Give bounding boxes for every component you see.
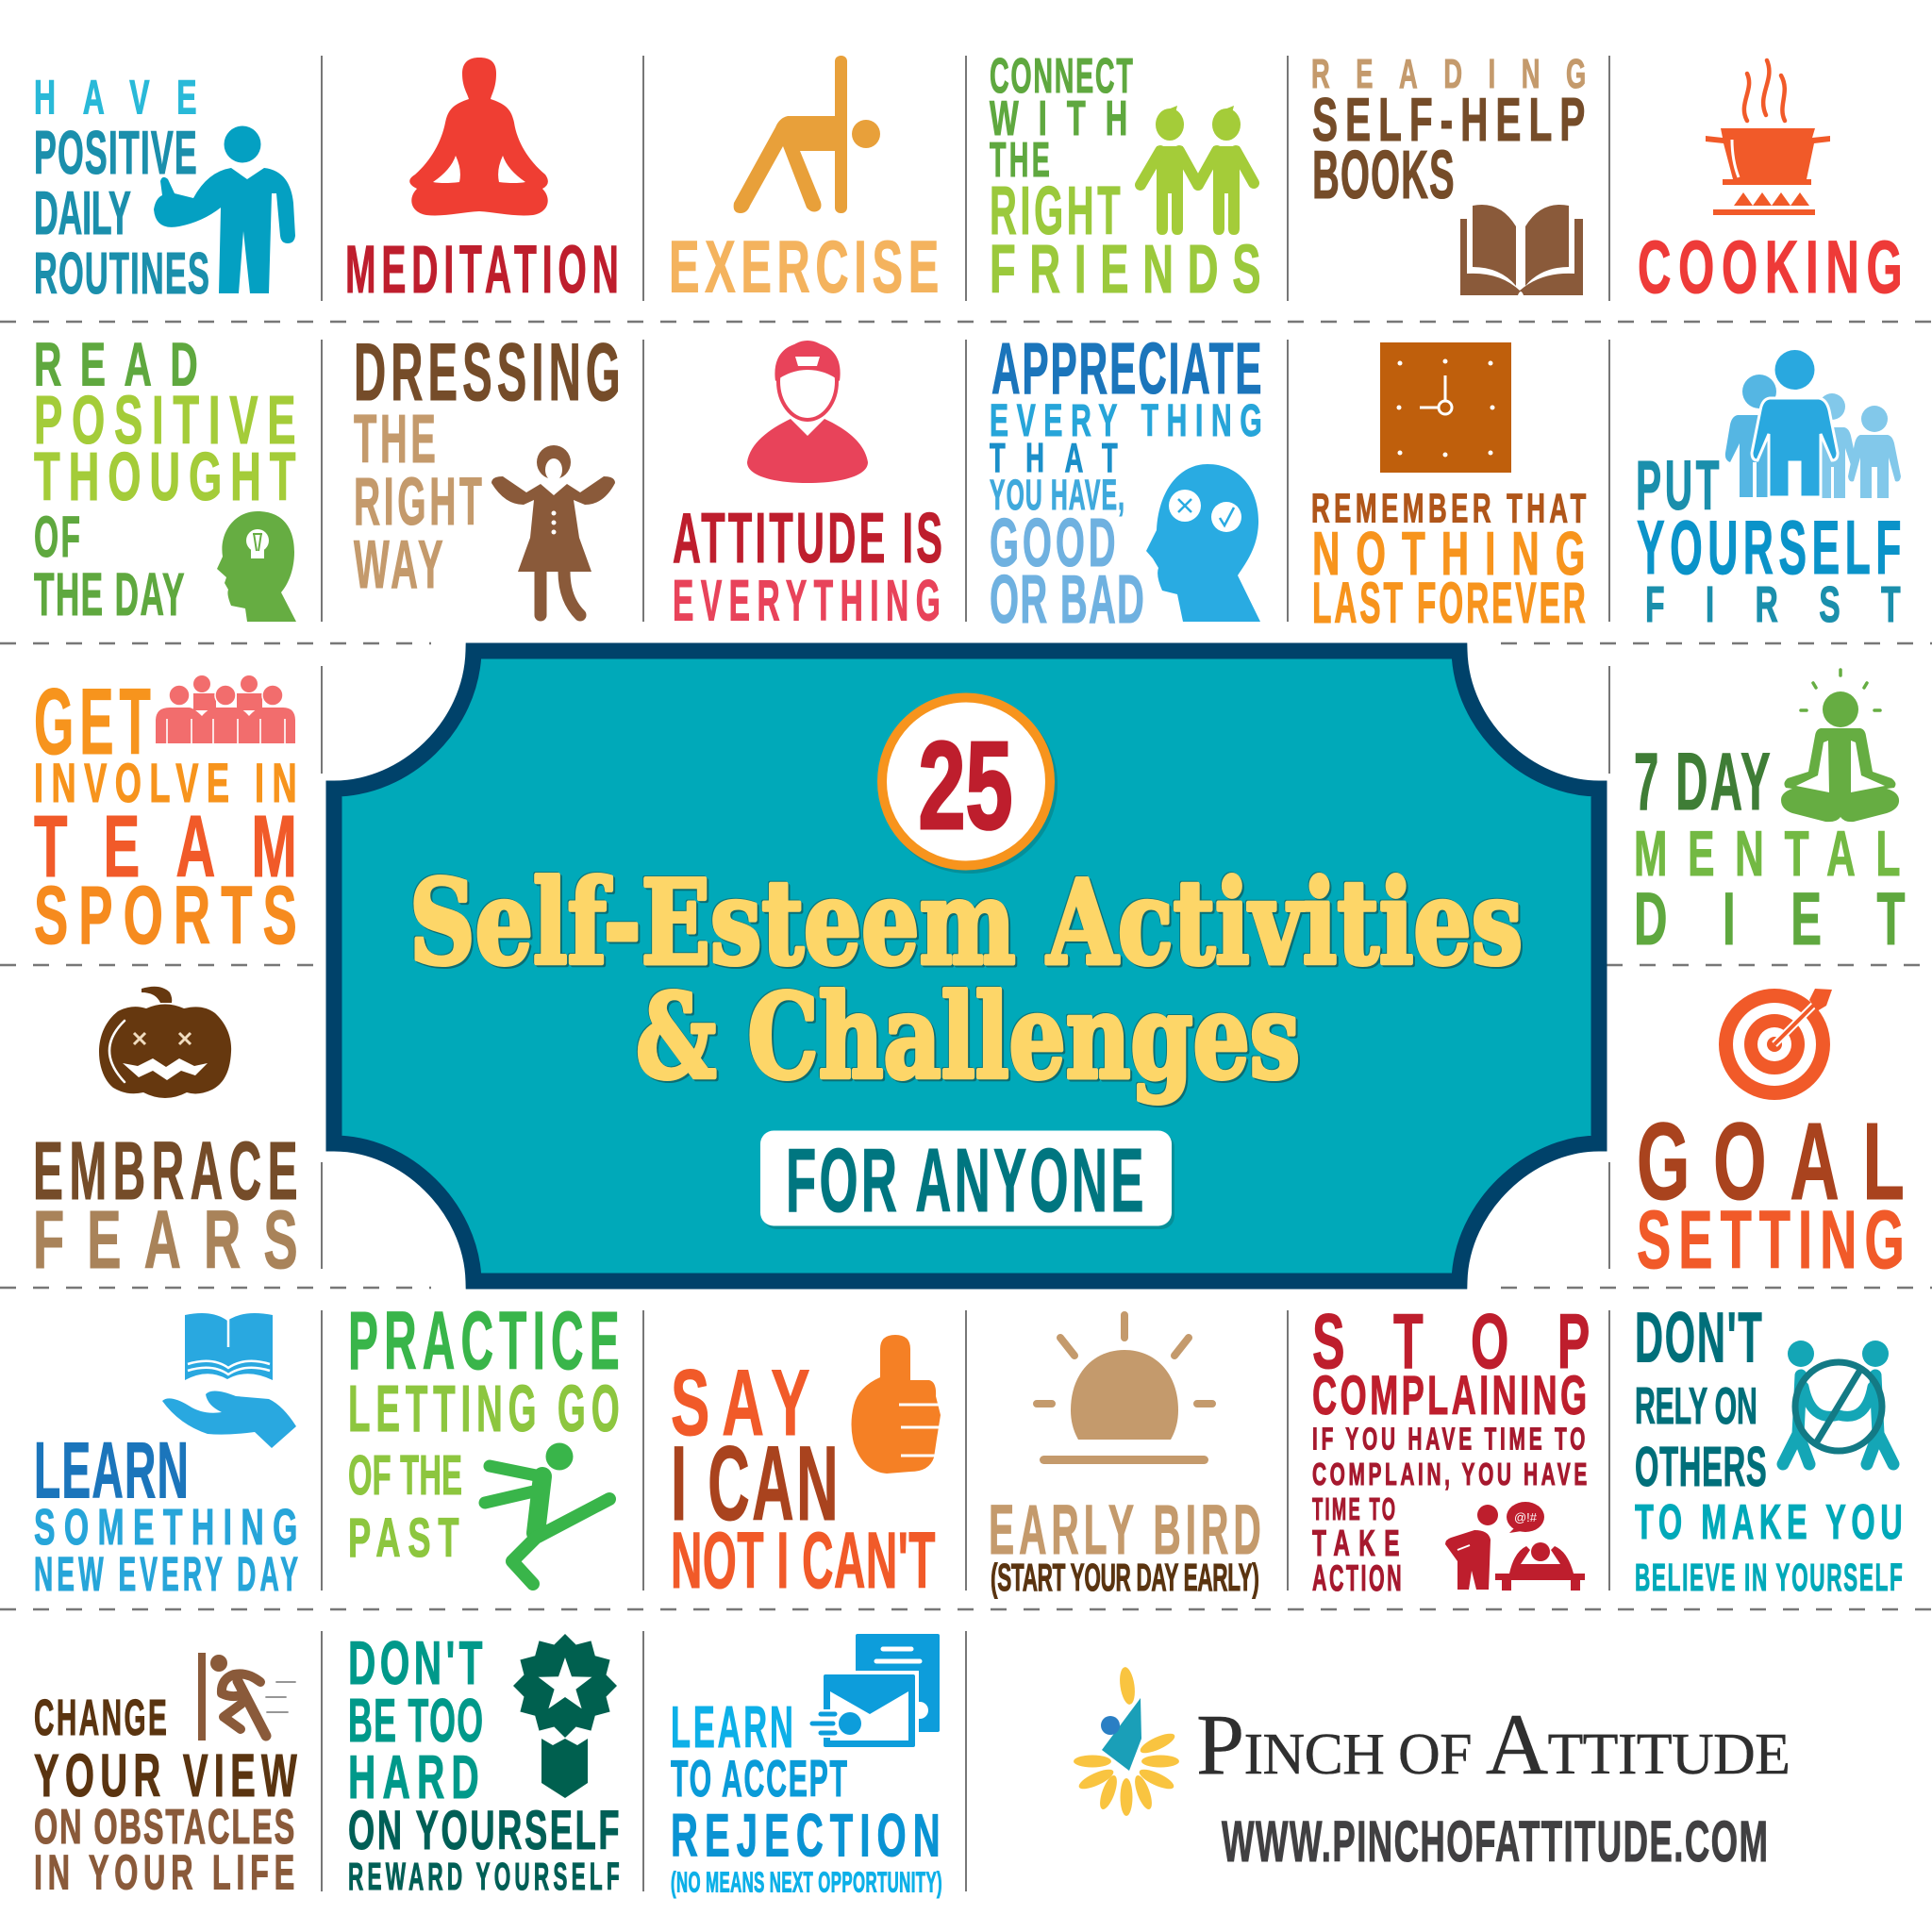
- text: 7 day mental diet: MENTAL: [1634, 819, 1900, 891]
- icon: documents and envelope: [812, 1634, 940, 1751]
- text: practice letting go of the past: PAST: [348, 1507, 459, 1569]
- text: change your view on obstacles in your life: ON OBSTACLES: [34, 1800, 294, 1855]
- text: don't rely on others to make you believe in yourself: TO MAKE YOU: [1635, 1495, 1903, 1550]
- text: pinch of attitude: PINCH OF ATTITUDE: [1196, 1696, 1790, 1792]
- text: stop complaining: TIME TO: [1312, 1491, 1395, 1526]
- text: learn to accept rejection: LEARN: [671, 1693, 793, 1760]
- panel: don't rely on others: [1635, 1297, 1903, 1600]
- text: say i can not i can't: I CAN: [671, 1425, 839, 1543]
- text: get involve in team sports: GET: [34, 670, 151, 774]
- text: embrace fears: EMBRACE: [33, 1124, 297, 1217]
- text: don't rely on others to make you believe in yourself: RELY ON: [1635, 1378, 1757, 1435]
- text: have positive daily routines: [34, 72, 209, 307]
- text: say i can not i can't: [671, 1351, 936, 1606]
- icon: open book: [1460, 205, 1583, 295]
- subtitle pill: FOR ANYONE: [786, 1130, 1144, 1231]
- icon: meditating figure: [409, 58, 548, 215]
- text: say i can not i can't: NOT I CAN'T: [671, 1518, 935, 1606]
- icon: people complaining with speech bubble: [1445, 1502, 1585, 1591]
- text: stop complaining: TAKE: [1312, 1523, 1400, 1563]
- text: read positive thought of the day: OF: [34, 505, 80, 570]
- text: embrace fears: FEARS: [33, 1194, 298, 1286]
- text: 7 day mental diet: 7 DAY: [1634, 736, 1771, 827]
- text: put yourself first: [1636, 446, 1902, 633]
- panel: get involve in team sports: [34, 670, 297, 961]
- text: goal setting: SETTING: [1637, 1194, 1905, 1286]
- icon: stretching figure: [734, 56, 880, 213]
- panel: change your view on obstacles: [34, 1653, 297, 1900]
- icon: meditating figure with rays: [1781, 670, 1899, 822]
- panel: stop complaining: [1312, 1296, 1590, 1599]
- text: put yourself first: FIRST: [1645, 575, 1901, 633]
- icon: head with light bulb: [217, 511, 296, 622]
- text: read positive thought of the day: [34, 331, 296, 628]
- text: practice letting go of the past: OF THE: [348, 1445, 462, 1507]
- text: get involve in team sports: SPORTS: [34, 870, 297, 961]
- text: remember that nothing last forever: [1311, 485, 1586, 636]
- text: don't be too hard on yourself reward yourself: BE TOO: [348, 1688, 483, 1756]
- text: don't be too hard on yourself reward yourself: ON YOURSELF: [348, 1800, 619, 1861]
- text: have positive daily routines: POSITIVE: [34, 120, 197, 188]
- text: read positive thought of the day: THE DAY: [34, 560, 185, 628]
- panel: 7 day mental diet: [1634, 670, 1906, 960]
- text: goal setting: [1637, 1101, 1905, 1286]
- text: learn something new every day: NEW EVERY DAY: [34, 1547, 298, 1601]
- text: don't be too hard on yourself reward yourself: HARD: [348, 1743, 479, 1811]
- text: cooking: COOKING: [1638, 225, 1903, 308]
- icon: team of people: [156, 675, 295, 743]
- text: connect with the right friends: CONNECT: [990, 48, 1133, 103]
- panel: reading self-help books: [1311, 50, 1586, 295]
- panel: dressing the right way: [354, 326, 621, 615]
- text: change your view on obstacles in your life: IN YOUR LIFE: [34, 1846, 294, 1900]
- text: get involve in team sports: INVOLVE IN: [34, 753, 297, 814]
- text: appreciate every thing that you have, good or bad: EVERY THING: [990, 396, 1262, 446]
- text: read positive thought of the day: THOUGHT: [34, 438, 296, 515]
- text: learn to accept rejection: REJECTION: [671, 1803, 941, 1870]
- panel: cooking: [1638, 60, 1903, 308]
- text: get involve in team sports: TEAM: [34, 798, 297, 895]
- title: Self-Esteem Activities: [409, 856, 1523, 991]
- text: appreciate every thing that you have, good or bad: OR BAD: [990, 562, 1144, 638]
- text: connect with the right friends: WITH: [990, 92, 1127, 146]
- text: dressing the right way: THE: [354, 402, 436, 477]
- text: connect with the right friends: [990, 48, 1260, 308]
- panel: connect with the right friends: [990, 48, 1260, 308]
- icon: award badge: [513, 1634, 617, 1798]
- panel: have positive daily routines: [34, 72, 295, 307]
- banner shape: [334, 651, 1599, 1281]
- text: stop complaining: COMPLAINING: [1312, 1365, 1587, 1426]
- text: learn something new every day: LEARN: [34, 1427, 189, 1515]
- text: goal setting: GOAL: [1637, 1101, 1905, 1223]
- text: appreciate every thing that you have, good or bad: APPRECIATE: [991, 329, 1262, 409]
- text: early bird: EARLY BIRD: [989, 1491, 1261, 1569]
- icon: pumpkin: [99, 987, 231, 1098]
- text: change your view on obstacles in your life: [34, 1690, 297, 1900]
- text: don't rely on others to make you believe in yourself: [1635, 1297, 1903, 1600]
- text: appreciate every thing that you have, good or bad: [990, 329, 1262, 638]
- text: embrace fears: [33, 1124, 298, 1286]
- text: attitude is everything: EVERYTHING: [673, 569, 941, 633]
- icon: head with cross and check: [1146, 464, 1260, 622]
- text: stop complaining: IF YOU HAVE TIME TO: [1312, 1422, 1585, 1457]
- panel: don't be too hard on yourself: [348, 1629, 620, 1899]
- icon: rising sun: [1037, 1315, 1212, 1464]
- text: remember that nothing last forever: LAST FOREVER: [1312, 571, 1586, 636]
- text: appreciate every thing that you have, good or bad: YOU HAVE,: [990, 471, 1124, 519]
- panel: embrace fears: [33, 987, 298, 1286]
- text: reading self-help books: READING: [1311, 50, 1586, 97]
- icon: family: [1725, 350, 1901, 498]
- panel: central title banner: [334, 651, 1599, 1281]
- text: learn to accept rejection: (NO MEANS NEXT OPPORTUNITY): [671, 1867, 942, 1899]
- panel: early bird: [989, 1315, 1261, 1600]
- icon: thumb up: [851, 1335, 941, 1474]
- text: reading self-help books: SELF-HELP: [1312, 86, 1585, 154]
- text: remember that nothing last forever: REMEMBER THAT: [1311, 485, 1586, 531]
- panel: goal setting: [1637, 989, 1905, 1286]
- icon: two people with prohibition sign: [1783, 1341, 1893, 1464]
- text: reading self-help books: [1311, 50, 1586, 213]
- text: don't rely on others to make you believe in yourself: OTHERS: [1635, 1437, 1767, 1499]
- text: have positive daily routines: HAVE: [34, 72, 196, 125]
- text: connect with the right friends: FRIENDS: [990, 230, 1260, 308]
- text: attitude is everything: [673, 498, 942, 633]
- badge: 25: [880, 696, 1058, 874]
- text: appreciate every thing that you have, good or bad: GOOD: [990, 506, 1116, 581]
- text: stop complaining: ACTION: [1312, 1557, 1402, 1599]
- icon: square clock: [1380, 342, 1511, 473]
- text: 7 day mental diet: DIET: [1634, 877, 1906, 960]
- text: change your view on obstacles in your life: CHANGE: [34, 1690, 167, 1746]
- panel: meditation: [345, 58, 619, 308]
- text: learn something new every day: SOMETHING: [34, 1498, 297, 1556]
- text: say i can not i can't: SAY: [671, 1351, 809, 1456]
- text: get involve in team sports: [34, 670, 297, 961]
- badge: 25: 25: [919, 716, 1013, 855]
- text: learn to accept rejection: [671, 1693, 942, 1899]
- icon: two friends: [1141, 106, 1254, 235]
- text: website: WWW.PINCHOFATTITUDE.COM: [1222, 1808, 1768, 1874]
- text: don't rely on others to make you believe in yourself: DON'T: [1635, 1297, 1762, 1377]
- icon: person with cap: [747, 342, 868, 483]
- text: reading self-help books: BOOKS: [1312, 138, 1455, 213]
- icon: kicking figure: [485, 1443, 609, 1584]
- icon: cooking pot: [1706, 60, 1830, 215]
- panel: read positive thought of the day: [34, 331, 296, 628]
- title: & Challenges: [636, 970, 1300, 1106]
- panel: appreciate every thing: [990, 329, 1262, 638]
- text: practice letting go of the past: PRACTICE: [348, 1294, 620, 1387]
- title: [409, 856, 1523, 1106]
- text: practice letting go of the past: [348, 1294, 620, 1569]
- panel: learn something new every day: [34, 1313, 298, 1601]
- text: don't be too hard on yourself reward yourself: DON'T: [348, 1629, 483, 1697]
- text: stop complaining: [1312, 1296, 1590, 1599]
- text: change your view on obstacles in your life: YOUR VIEW: [34, 1743, 297, 1809]
- icon: people complaining with speech bubble: @!#: [1514, 1510, 1538, 1524]
- text: learn something new every day: [34, 1427, 298, 1601]
- text: attitude is everything: ATTITUDE IS: [673, 498, 942, 577]
- text: remember that nothing last forever: NOTHING: [1312, 520, 1585, 588]
- panel: remember that nothing last forever: [1311, 342, 1586, 636]
- text: dressing the right way: WAY: [354, 527, 443, 603]
- text: don't be too hard on yourself reward yourself: [348, 1629, 620, 1899]
- text: exercise: EXERCISE: [669, 225, 939, 308]
- text: connect with the right friends: THE: [990, 132, 1050, 187]
- panel: put yourself first: [1636, 350, 1902, 633]
- panel: attitude is everything: [673, 342, 942, 633]
- text: dressing the right way: [354, 326, 621, 603]
- logo: pinch of attitude: [1074, 1666, 1790, 1874]
- text: meditation: MEDITATION: [345, 233, 619, 308]
- text: have positive daily routines: ROUTINES: [34, 240, 209, 307]
- text: 7 day mental diet: [1634, 736, 1906, 960]
- panel: learn to accept rejection: [671, 1634, 942, 1899]
- text: put yourself first: PUT: [1636, 446, 1720, 525]
- icon: flower with figure: [1074, 1666, 1179, 1816]
- text: don't rely on others to make you believe in yourself: BELIEVE IN YOURSELF: [1635, 1557, 1903, 1600]
- text: connect with the right friends: RIGHT: [990, 174, 1121, 249]
- icon: man thumbs up: [154, 126, 295, 293]
- text: have positive daily routines: DAILY: [34, 180, 131, 248]
- text: put yourself first: YOURSELF: [1637, 505, 1901, 590]
- text: don't be too hard on yourself reward yourself: REWARD YOURSELF: [348, 1856, 620, 1899]
- icon: runner at barrier: [198, 1653, 295, 1740]
- text: early bird: (START YOUR DAY EARLY): [991, 1557, 1259, 1600]
- text: read positive thought of the day: READ: [34, 331, 198, 399]
- text: learn to accept rejection: TO ACCEPT: [671, 1751, 847, 1807]
- text: appreciate every thing that you have, good or bad: THAT: [990, 434, 1118, 481]
- text: stop complaining: COMPLAIN, YOU HAVE: [1312, 1457, 1587, 1491]
- text: stop complaining: STOP: [1312, 1296, 1590, 1385]
- text: practice letting go of the past: LETTING GO: [348, 1372, 620, 1445]
- panel: practice letting go of the past: [348, 1294, 620, 1584]
- icon: target with arrow: [1719, 989, 1832, 1100]
- icon: hand holding book: [162, 1313, 296, 1448]
- panel: say i can not i can't: [671, 1335, 941, 1606]
- text: dressing the right way: DRESSING: [354, 326, 621, 418]
- icon: woman in coat: [491, 445, 615, 615]
- text: read positive thought of the day: POSITIVE: [34, 381, 295, 458]
- text: dressing the right way: RIGHT: [354, 465, 482, 540]
- panel: exercise: [669, 56, 939, 308]
